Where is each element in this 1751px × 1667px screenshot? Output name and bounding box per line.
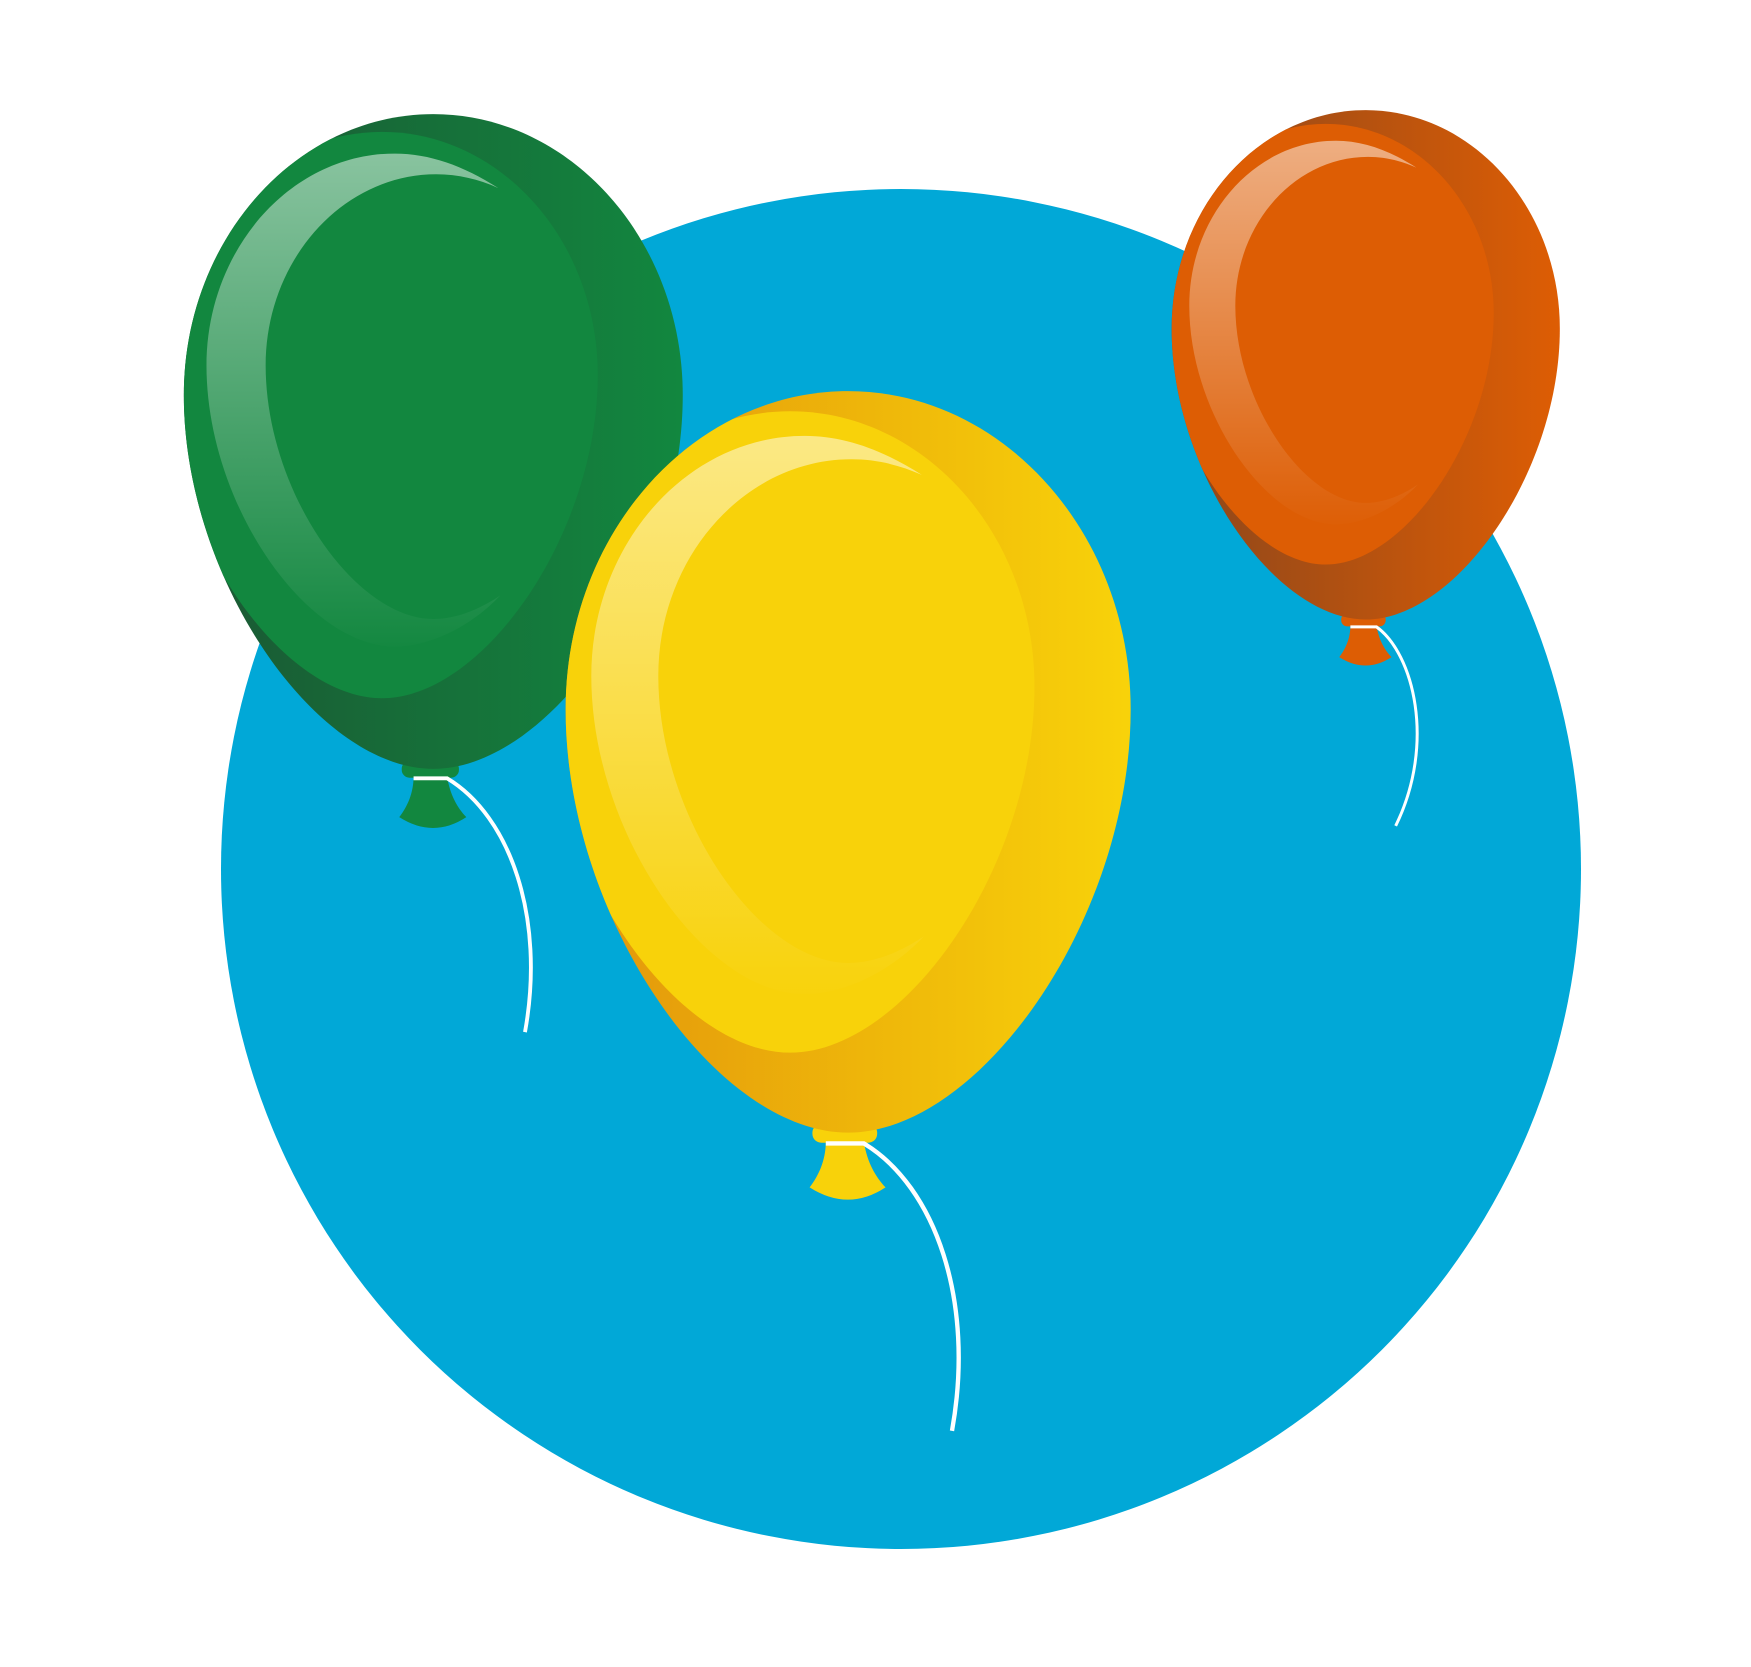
yellow balloon bbox=[546, 391, 1131, 1431]
yellow balloon body bbox=[566, 391, 1131, 1133]
yellow balloon inner tone bbox=[546, 411, 1034, 1053]
green balloon body bbox=[184, 114, 683, 769]
orange balloon bbox=[1158, 110, 1560, 826]
green balloon highlight bbox=[206, 154, 500, 647]
yellow balloon collar bbox=[812, 1124, 877, 1143]
orange balloon inner tone bbox=[1158, 124, 1494, 565]
orange balloon neck bbox=[1339, 626, 1391, 666]
yellow balloon string bbox=[826, 1143, 959, 1431]
orange balloon collar bbox=[1341, 613, 1386, 626]
yellow balloon neck bbox=[810, 1142, 886, 1200]
green balloon string bbox=[414, 778, 531, 1032]
green balloon inner tone bbox=[166, 132, 598, 698]
green balloon neck bbox=[399, 777, 466, 828]
orange balloon highlight bbox=[1189, 141, 1418, 524]
yellow balloon highlight bbox=[591, 436, 924, 994]
green balloon collar bbox=[402, 761, 459, 778]
green balloon bbox=[166, 114, 683, 1032]
orange balloon string bbox=[1350, 627, 1417, 826]
blue background circle bbox=[221, 189, 1581, 1549]
orange balloon body bbox=[1172, 110, 1560, 620]
